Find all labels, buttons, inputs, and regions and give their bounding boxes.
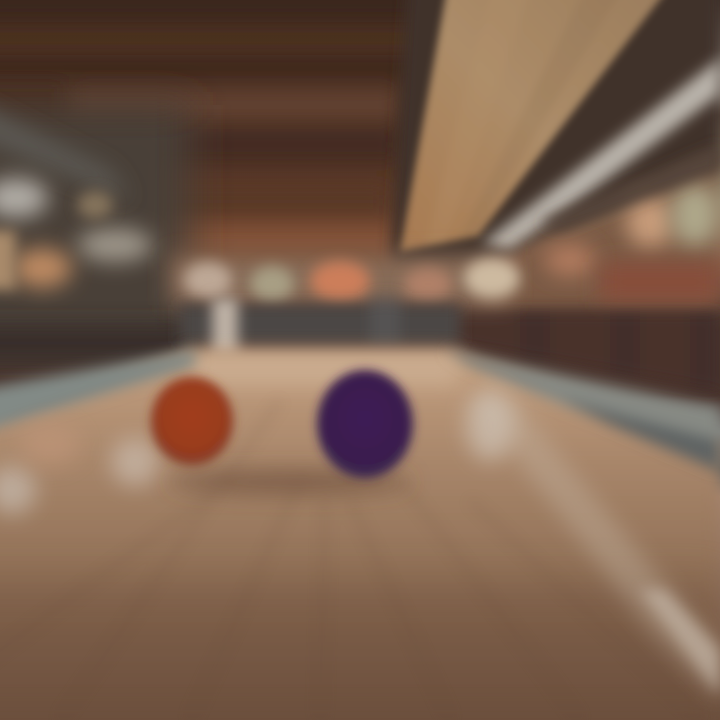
ceiling: right dark section: [390, 0, 720, 270]
floor planks: [0, 400, 700, 720]
left wall: [0, 95, 190, 361]
ceiling: tan panel: [400, 0, 690, 252]
bowling pins: [212, 298, 238, 358]
right wall with colourful lights: [470, 145, 720, 310]
ceiling light strip: [482, 58, 720, 252]
right gutter: [445, 350, 720, 472]
ceiling: [0, 0, 480, 270]
ball shadow: [170, 470, 410, 494]
right dark railing: [450, 312, 720, 392]
red bowling ball: [151, 377, 233, 465]
back lane dark band: [180, 295, 460, 345]
left gutter: [0, 350, 195, 444]
floor reflections: [0, 389, 720, 700]
back wall lights: [170, 255, 520, 305]
lane floor: [0, 350, 720, 720]
purple bowling ball: [317, 370, 413, 478]
